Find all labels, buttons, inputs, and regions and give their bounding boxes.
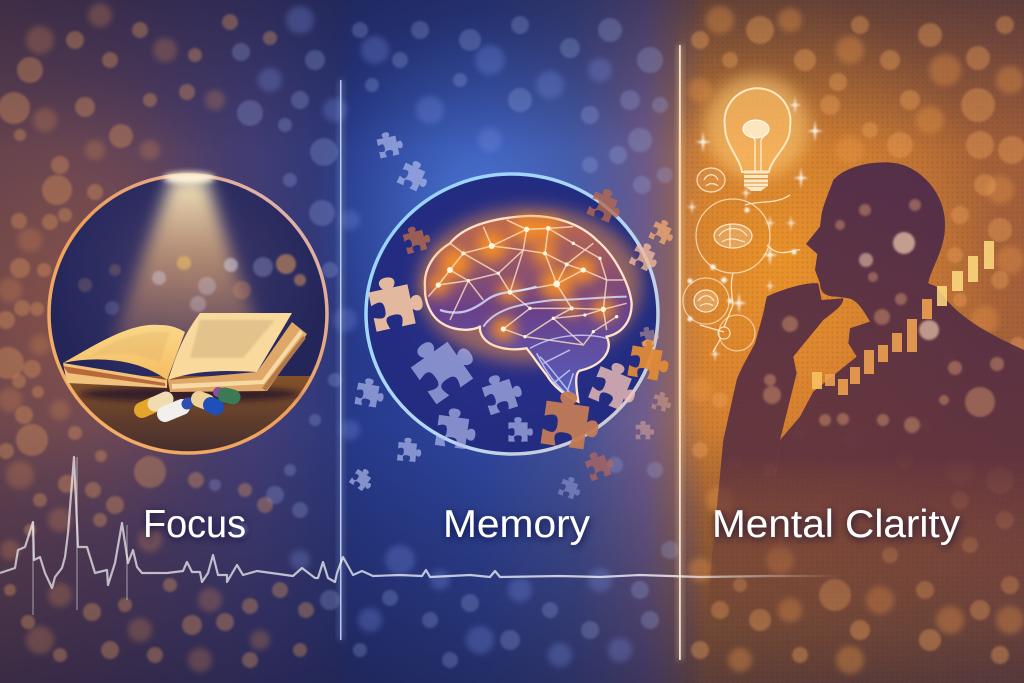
panel: memory circle with brain — [366, 174, 658, 454]
node glow — [427, 216, 615, 342]
divider: memory / focus — [338, 80, 344, 640]
sparkles — [686, 96, 823, 362]
heading: Memory: Memory — [443, 503, 591, 546]
wooden table — [66, 376, 310, 452]
neural nodes — [436, 226, 618, 338]
focus ring — [49, 175, 327, 453]
divider: memory / clarity — [677, 45, 683, 660]
brain illustration — [425, 216, 632, 402]
rising bar chart — [812, 241, 994, 395]
ECG waveform — [0, 457, 840, 615]
heading: Focus: Focus — [143, 503, 246, 546]
bokeh: warm left panel — [0, 14, 314, 668]
neural network lines — [428, 220, 627, 400]
silhouette of thinking man — [700, 162, 1024, 683]
heading: Mental Clarity: Mental Clarity — [712, 503, 961, 546]
brain glow — [418, 207, 642, 363]
small brain icons and links — [683, 168, 800, 352]
panel: focus circle with book and capsules — [40, 172, 340, 460]
bokeh: cool left and centre panels — [209, 16, 679, 668]
bokeh: orange right panel — [691, 16, 1024, 664]
panel: mental clarity silhouette and ideas — [683, 75, 1024, 683]
lightbulb icon — [705, 75, 809, 191]
spotlight beam — [112, 178, 265, 345]
spotlight source glow — [163, 172, 215, 184]
capsules — [142, 392, 233, 414]
open book — [63, 313, 307, 402]
puzzle pieces — [349, 129, 678, 501]
bokeh over silhouette — [763, 199, 1004, 433]
memory ring — [366, 174, 658, 454]
bokeh inside focus circle — [78, 254, 306, 315]
